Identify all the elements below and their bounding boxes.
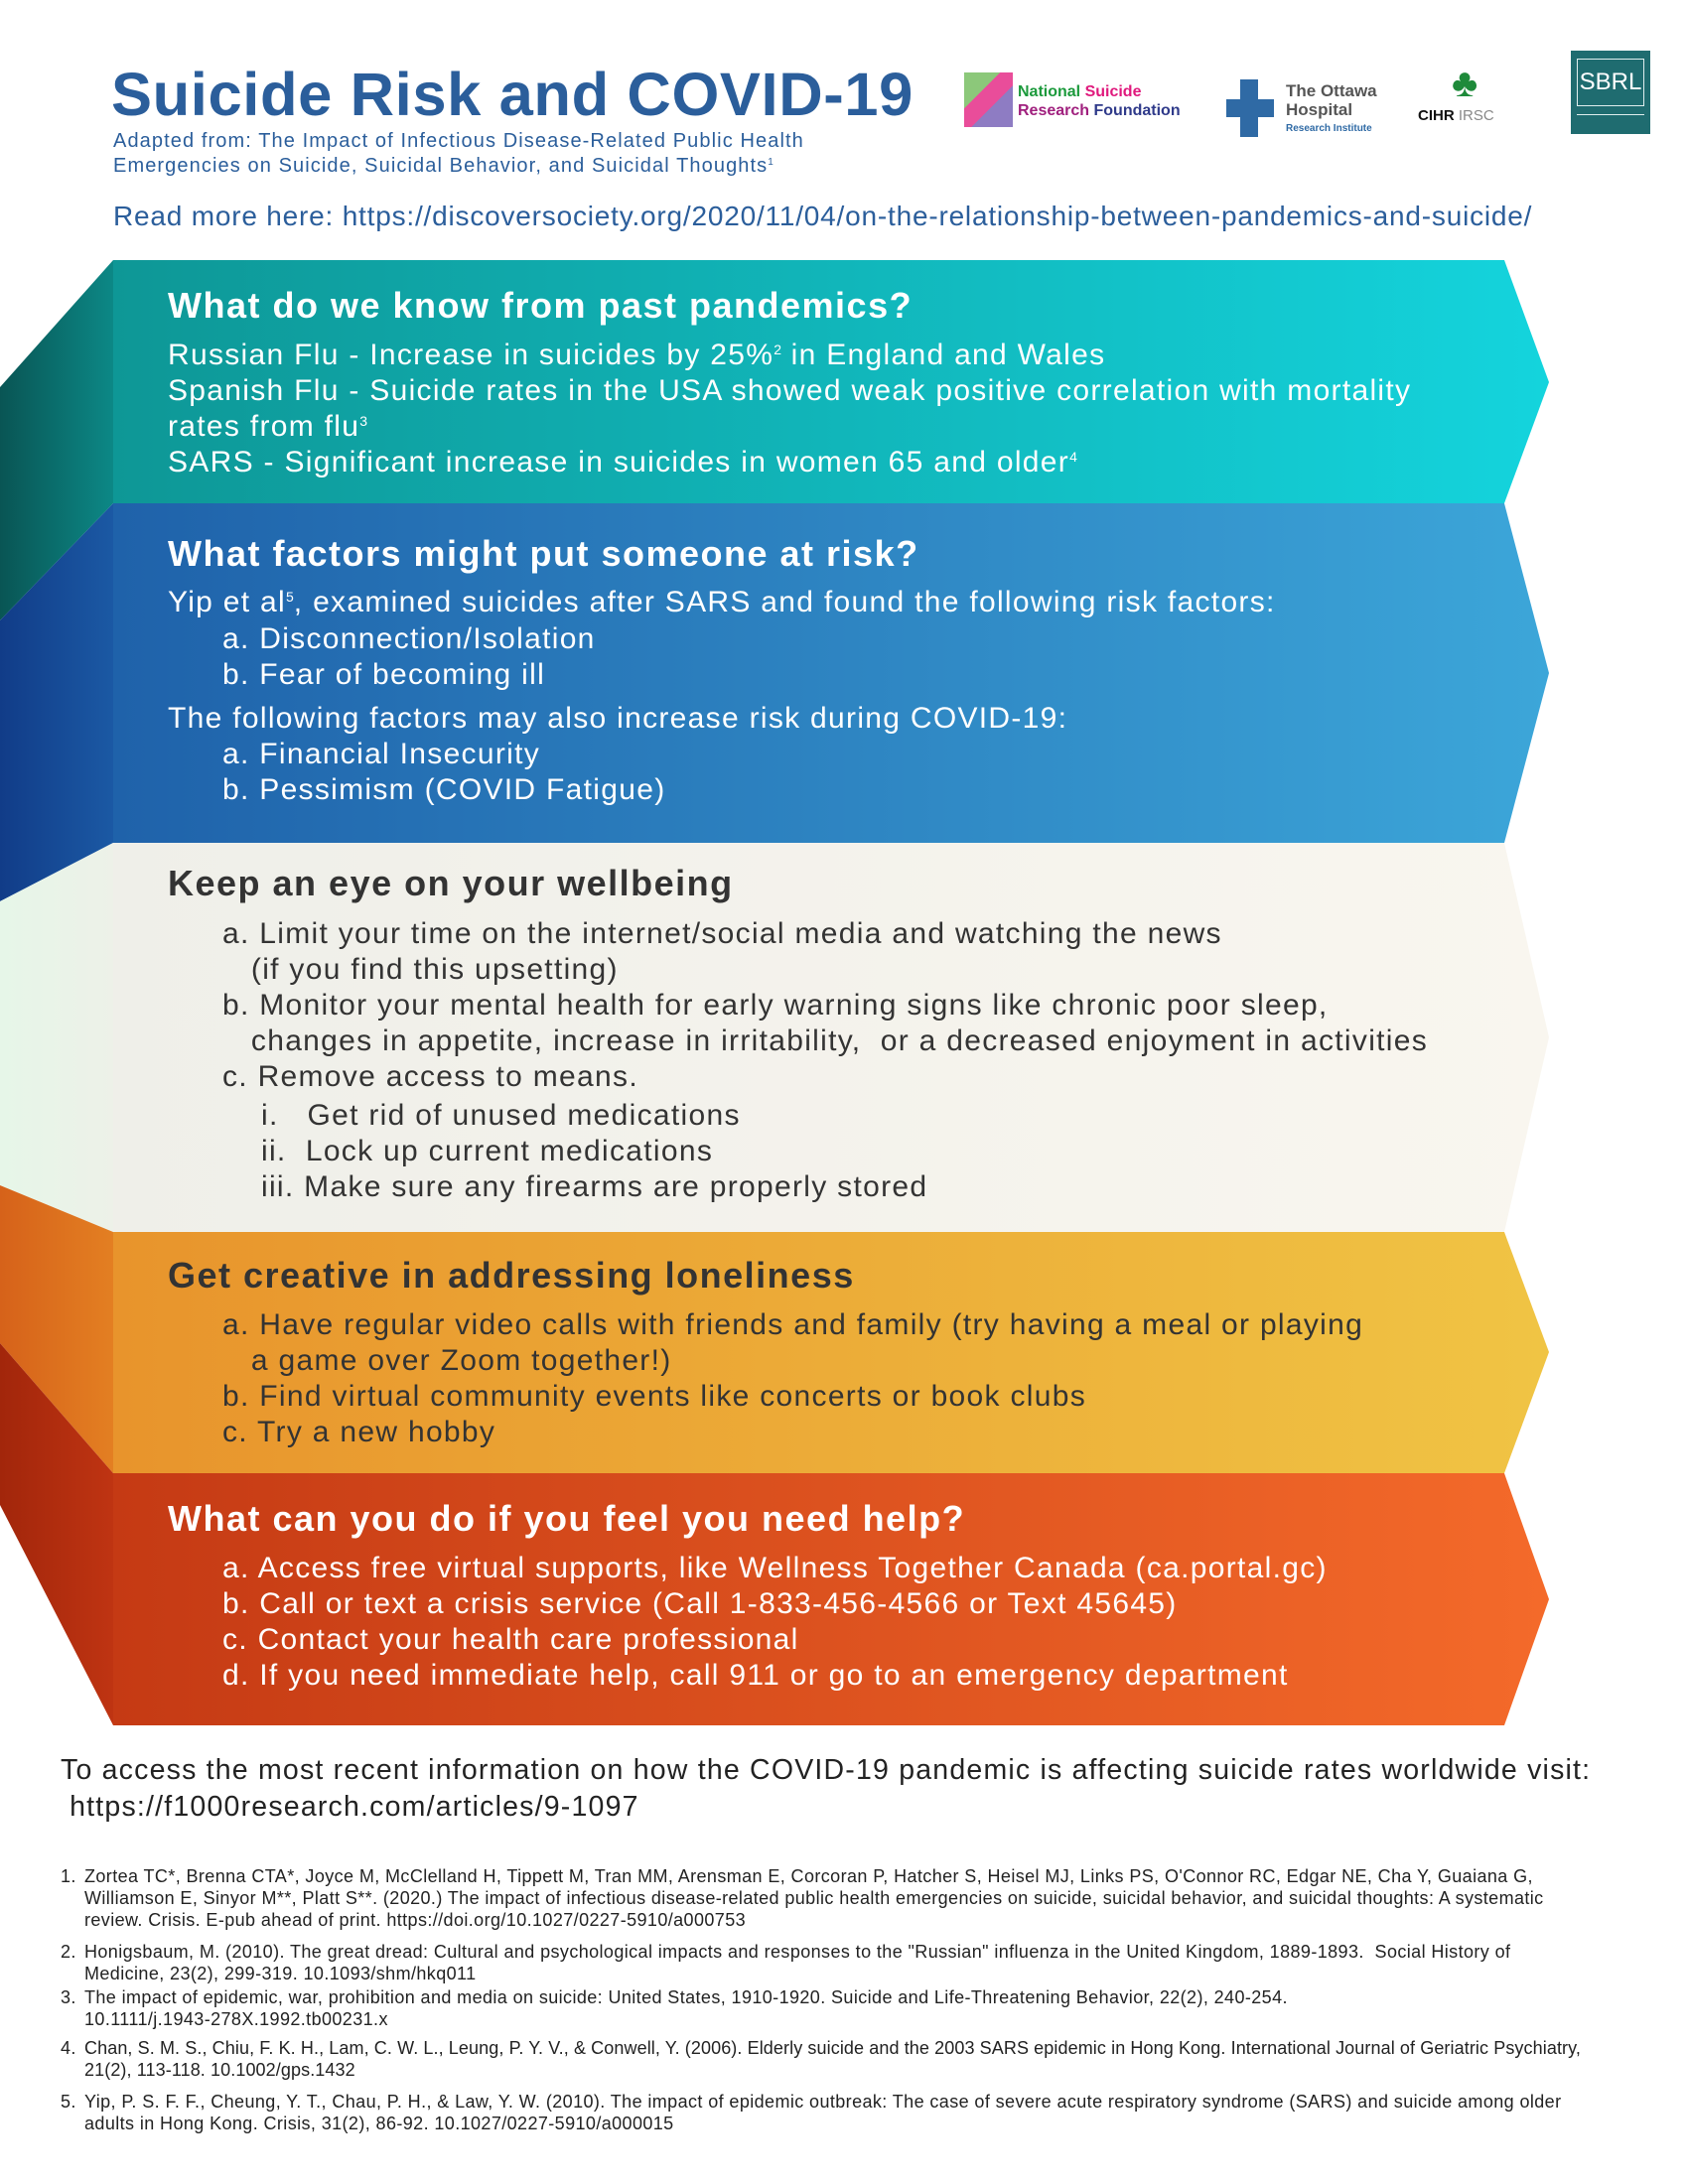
- text: SARS - Significant increase in suicides in women 65 and older4: [168, 446, 1077, 478]
- references: Zortea TC*, Brenna CTA*, Joyce M, McClelland H, Tippett M, Tran MM, Arensman E, Corcoran P, Hatcher S, Heisel MJ, Links PS, O'Connor RC, Edgar NE, Cha Y, Guaiana G,: [84, 1866, 1533, 1886]
- heading: What factors might put someone at risk?: [168, 533, 919, 574]
- footer note: [61, 1754, 1591, 1823]
- panel: need help: [168, 1498, 1328, 1692]
- references: review. Crisis. E-pub ahead of print. https://doi.org/10.1027/0227-5910/a000753: [84, 1910, 746, 1930]
- panel shape: risk factors: [0, 503, 1549, 901]
- references: 21(2), 113-118. 10.1002/gps.1432: [84, 2060, 355, 2080]
- list: b. Monitor your mental health for early warning signs like chronic poor sleep,: [222, 989, 1329, 1022]
- panel: loneliness: [168, 1255, 1363, 1448]
- logo: CIHR IRSC: [1418, 62, 1494, 124]
- list: a. Access free virtual supports, like Wellness Together Canada (ca.portal.gc): [222, 1552, 1328, 1584]
- list: a game over Zoom together!): [251, 1344, 672, 1377]
- read more link: Read more here: https://discoversociety.org/2020/11/04/on-the-relationship-between-pandemics-and-suicide/: [113, 201, 1532, 231]
- heading: What can you do if you feel you need help?: [168, 1498, 965, 1539]
- text: rates from flu3: [168, 410, 367, 443]
- references: adults in Hong Kong. Crisis, 31(2), 86-92. 10.1027/0227-5910/a000015: [84, 2114, 674, 2133]
- heading: What do we know from past pandemics?: [168, 285, 913, 326]
- logo: CIHR IRSC: ♣: [1452, 62, 1477, 105]
- list: [222, 1308, 1363, 1448]
- references: [61, 1866, 1581, 2133]
- footer note: https://f1000research.com/articles/9-1097: [70, 1791, 639, 1823]
- references: 3.: [61, 1987, 76, 2007]
- panel: wellbeing: [168, 863, 1428, 1203]
- panel shape: loneliness: [0, 1185, 1549, 1473]
- text: Spanish Flu - Suicide rates in the USA showed weak positive correlation with mortality: [168, 374, 1411, 407]
- panel: wellbeing: iii. Make sure any firearms are properly stored: [261, 1170, 927, 1203]
- logo: The Ottawa Hospital: The Ottawa: [1286, 81, 1377, 100]
- logo: National Suicide Research Foundation: National Suicide: [1018, 83, 1141, 100]
- references: 10.1111/j.1943-278X.1992.tb00231.x: [84, 2009, 388, 2029]
- references: Yip, P. S. F. F., Cheung, Y. T., Chau, P. H., & Law, Y. W. (2010). The impact of epidemic outbreak: The case of severe acute respiratory syndrome (SARS) and suicide among older: [84, 2092, 1561, 2112]
- logo: National Suicide Research Foundation: Research Foundation: [1018, 102, 1181, 119]
- list: changes in appetite, increase in irritability, or a decreased enjoyment in activities: [251, 1024, 1428, 1057]
- panel shape: need help: [0, 1343, 1549, 1725]
- references: The impact of epidemic, war, prohibition and media on suicide: United States, 1910-1920. Suicide and Life-Threatening Behavior, 22(2), 240-254.: [84, 1987, 1288, 2007]
- references: Williamson E, Sinyor M**, Platt S**. (2020.) The impact of infectious disease-related public health emergencies on suicide, suicidal behavior, and suicidal thoughts: A systematic: [84, 1888, 1544, 1908]
- panel: wellbeing: ii. Lock up current medications: [261, 1135, 713, 1167]
- text: [168, 339, 1411, 478]
- text: Russian Flu - Increase in suicides by 25%2 in England and Wales: [168, 339, 1105, 371]
- list: [222, 1552, 1328, 1692]
- logo: SBRL: [1571, 51, 1650, 134]
- references: Chan, S. M. S., Chiu, F. K. H., Lam, C. W. L., Leung, P. Y. V., & Conwell, Y. (2006). Elderly suicide and the 2003 SARS epidemic in Hong Kong. International Journal of Geriatric Psychiatry,: [84, 2038, 1581, 2058]
- panel: risk factors: [168, 533, 1276, 806]
- panel: risk factors: b. Pessimism (COVID Fatigue): [222, 773, 665, 806]
- list: a. Have regular video calls with friends and family (try having a meal or playing: [222, 1308, 1363, 1341]
- logo: The Ottawa Hospital: Research Institute: [1286, 123, 1372, 134]
- list: b. Find virtual community events like concerts or book clubs: [222, 1380, 1086, 1413]
- heading: Get creative in addressing loneliness: [168, 1255, 855, 1296]
- references: Honigsbaum, M. (2010). The great dread: Cultural and psychological impacts and responses to the "Russian" influenza in the United Kingdom, 1889-1893. Social History of: [84, 1942, 1510, 1962]
- list: [222, 917, 1428, 1093]
- list: (if you find this upsetting): [251, 953, 619, 986]
- references: 5.: [61, 2092, 76, 2112]
- references: 2.: [61, 1942, 76, 1962]
- references: 4.: [61, 2038, 76, 2058]
- panel: risk factors: a. Disconnection/Isolation: [222, 622, 596, 655]
- list: c. Try a new hobby: [222, 1416, 495, 1448]
- list: c. Contact your health care professional: [222, 1623, 799, 1656]
- list: c. Remove access to means.: [222, 1060, 638, 1093]
- logo: CIHR IRSC: CIHR IRSC: [1418, 107, 1494, 124]
- logo: The Ottawa Hospital: [1226, 79, 1377, 137]
- list: b. Call or text a crisis service (Call 1-833-456-4566 or Text 45645): [222, 1587, 1178, 1620]
- heading: Keep an eye on your wellbeing: [168, 863, 734, 903]
- logo: The Ottawa Hospital: Hospital: [1286, 100, 1352, 119]
- subtitle: [113, 130, 804, 177]
- panel shape: past pandemics: [0, 260, 1549, 620]
- subtitle: Adapted from: The Impact of Infectious Disease-Related Public Health: [113, 130, 804, 152]
- list: d. If you need immediate help, call 911 or go to an emergency department: [222, 1659, 1289, 1692]
- panel: risk factors: a. Financial Insecurity: [222, 738, 540, 770]
- references: Medicine, 23(2), 299-319. 10.1093/shm/hkq011: [84, 1964, 477, 1983]
- subtitle: Emergencies on Suicide, Suicidal Behavior, and Suicidal Thoughts1: [113, 155, 774, 177]
- logo: SBRL: SBRL: [1580, 68, 1641, 95]
- references: 1.: [61, 1866, 76, 1886]
- logo: National Suicide Research Foundation: [964, 72, 1181, 127]
- panel: risk factors: b. Fear of becoming ill: [222, 658, 545, 691]
- panel: wellbeing: i. Get rid of unused medications: [261, 1099, 741, 1132]
- text: Yip et al5, examined suicides after SARS and found the following risk factors:: [168, 586, 1276, 618]
- title: Suicide Risk and COVID-19: [111, 61, 914, 129]
- panel shape: wellbeing: [0, 843, 1549, 1232]
- panel: risk factors: The following factors may also increase risk during COVID-19:: [168, 702, 1067, 735]
- list: a. Limit your time on the internet/social media and watching the news: [222, 917, 1222, 950]
- footer note: To access the most recent information on how the COVID-19 pandemic is affecting suicide rates worldwide visit:: [61, 1754, 1591, 1786]
- panel: past pandemics: [168, 285, 1411, 478]
